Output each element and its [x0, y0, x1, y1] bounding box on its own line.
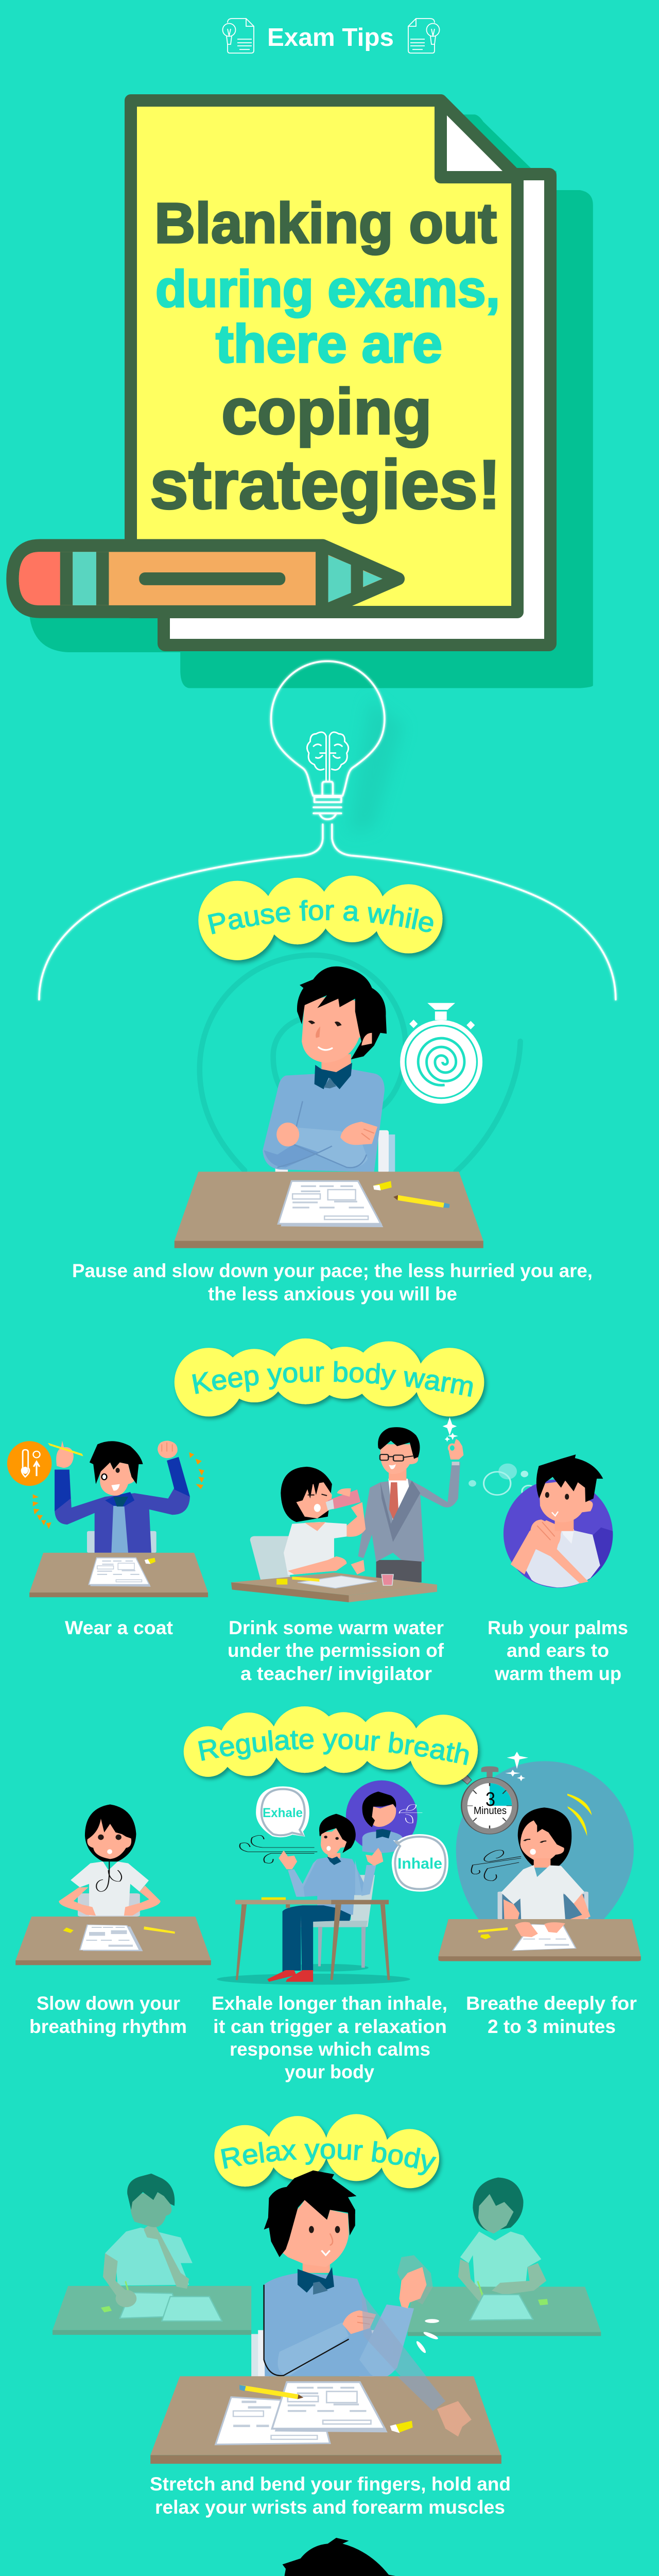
motion marks — [567, 1794, 592, 1836]
captions: it can trigger a relaxation — [213, 2016, 447, 2037]
caption: relax your wrists and forearm muscles — [155, 2497, 505, 2518]
stopwatch labels — [474, 1789, 507, 1817]
title text: strategies! — [150, 446, 501, 523]
desk — [150, 2376, 501, 2464]
ghost arm over desk — [397, 2376, 445, 2411]
exam paper — [278, 1181, 383, 1227]
purple circle — [504, 1479, 613, 1588]
caption: the less anxious you will be — [208, 1283, 457, 1304]
chair — [87, 1531, 157, 1553]
faded girl at desk — [408, 2178, 601, 2336]
captions: Slow down your — [37, 1993, 180, 2014]
captions: warm them up — [494, 1663, 621, 1684]
front page — [131, 100, 517, 612]
desk — [438, 1919, 641, 1961]
bubbles — [469, 1464, 535, 1497]
purple circle with inhaling boy — [346, 1781, 422, 1853]
captions: Breathe deeply for — [466, 1993, 637, 2014]
section: keep your body warm — [7, 1338, 628, 1684]
raised hand — [399, 2267, 427, 2309]
section: light bulb with wires — [39, 661, 616, 999]
eraser — [145, 1558, 155, 1564]
desk — [175, 1172, 483, 1248]
bubble heading: Keep your body warm — [192, 1361, 473, 1397]
illustration: background students (faded) — [53, 2174, 601, 2336]
bubble heading: Regulate your breath — [198, 1730, 469, 1765]
title text: during exams, — [155, 260, 500, 318]
student in coat — [48, 1440, 190, 1553]
back page — [164, 174, 550, 645]
wires — [39, 824, 616, 999]
exam paper — [89, 1558, 151, 1587]
boy head overlapping bubble — [269, 2171, 356, 2219]
pencil and eraser — [63, 1926, 175, 1934]
speech bubble: inhale — [392, 1834, 448, 1892]
captions: 2 to 3 minutes — [488, 2016, 616, 2037]
heading text: Exam Tips — [267, 24, 394, 52]
title text: coping — [221, 376, 432, 448]
eraser — [390, 2421, 413, 2433]
sparkles — [443, 1417, 458, 1442]
illustration: rubbing palms — [469, 1454, 613, 1588]
wind lines — [472, 1850, 521, 1881]
boy — [205, 2538, 463, 2576]
illustration: drink water with teacher — [231, 1417, 463, 1602]
icon: brain — [307, 732, 349, 782]
eraser — [373, 1181, 392, 1191]
pencil — [393, 1195, 449, 1208]
title text: Blanking out — [154, 192, 497, 255]
pencil and eraser — [478, 1927, 508, 1939]
section: pause for a while — [72, 876, 593, 1304]
bubble heading: Relax your body — [221, 2141, 437, 2175]
desk — [235, 1897, 390, 1980]
illustration: wear a coat — [7, 1440, 208, 1597]
captions: under the permission of — [228, 1640, 444, 1661]
breath lines — [96, 1860, 122, 1892]
teacher — [358, 1427, 463, 1582]
captions: response which calms — [230, 2039, 430, 2060]
captions — [65, 1617, 628, 1684]
captions: Rub your palms — [488, 1617, 628, 1638]
student — [263, 967, 387, 1172]
speech labels: Exhale — [263, 1806, 303, 1820]
girl — [59, 1804, 161, 1916]
icon: thermometer on orange circle — [7, 1441, 51, 1486]
captions: a teacher/ invigilator — [240, 1663, 432, 1684]
captions: breathing rhythm — [29, 2016, 187, 2037]
captions: Exhale longer than inhale, — [212, 1993, 447, 2014]
chair — [294, 1875, 375, 1968]
illustration: boy making fists — [177, 2538, 488, 2576]
stopwatch labels: Minutes — [474, 1805, 507, 1817]
sparkles — [505, 1752, 528, 1781]
caption: Pause and slow down your pace; the less hurried you are, — [72, 1260, 593, 1281]
paper, pencil, eraser, cup on desk — [276, 1574, 393, 1588]
speech bubble: exhale — [257, 1787, 308, 1837]
caption — [150, 2473, 511, 2518]
illustration: boy exhaling and inhaling — [217, 1781, 448, 1985]
illustration: main boy stretching — [150, 2171, 501, 2464]
pencil — [12, 546, 398, 612]
bubble heading — [174, 1338, 489, 1421]
exam paper and hands — [513, 1922, 576, 1951]
caption — [72, 1260, 593, 1304]
title text: there are — [216, 314, 442, 374]
boy — [267, 1814, 383, 1982]
bubble heading: Pause for a while — [207, 900, 433, 935]
icon: stopwatch with spiral — [400, 1003, 482, 1104]
chair — [497, 1892, 588, 1920]
faint spiral — [200, 955, 521, 1172]
floor shadows — [217, 1964, 410, 1985]
blue circle — [456, 1761, 634, 1920]
captions — [29, 1993, 637, 2082]
illustration: girl slowing breath — [15, 1804, 211, 1965]
bulb shadow — [349, 700, 404, 832]
section: regulate your breath — [15, 1706, 641, 2082]
bubble heading — [183, 1706, 482, 1789]
ghost hand on desk — [437, 2401, 472, 2436]
caption: Stretch and bend your fingers, hold and — [150, 2473, 511, 2495]
captions: Drink some warm water — [229, 1617, 444, 1638]
illustration: girl with stopwatch — [438, 1752, 641, 1961]
speech labels: Inhale — [397, 1855, 442, 1872]
title text — [150, 192, 501, 523]
wind lines — [240, 1835, 317, 1863]
chair — [250, 1536, 290, 1580]
desk — [15, 1917, 211, 1965]
girl — [501, 1807, 591, 1937]
captions: Wear a coat — [65, 1617, 173, 1638]
icon: document with bulb left — [222, 19, 254, 53]
chair — [78, 1893, 140, 1917]
illustration: student with crossed arms — [175, 955, 521, 1248]
boy — [511, 1454, 603, 1587]
title panel: paper and pencil — [12, 100, 593, 688]
pencil — [239, 2385, 303, 2399]
exam paper — [80, 1925, 143, 1951]
bubble heading — [214, 2114, 439, 2188]
section: relax your body — [39, 2114, 638, 2576]
desk — [29, 1553, 208, 1597]
page fold — [441, 100, 517, 177]
boy — [264, 2171, 414, 2378]
captions: and ears to — [507, 1640, 609, 1661]
motion ticks — [415, 2319, 439, 2354]
chair — [275, 1130, 395, 1173]
stopwatch — [461, 1766, 518, 1834]
exam papers — [216, 2382, 388, 2445]
paper shadow — [29, 114, 593, 688]
bulb outline — [271, 661, 385, 819]
captions: your body — [285, 2061, 374, 2082]
desk — [231, 1572, 437, 1602]
girl drinking — [281, 1467, 366, 1575]
faded boy at desk — [53, 2174, 251, 2335]
header: Exam Tips — [222, 19, 440, 53]
stopwatch labels: 3 — [485, 1789, 495, 1810]
ghost hand and arm — [361, 2255, 445, 2411]
bubble heading — [198, 876, 447, 965]
icon: document with bulb right — [408, 19, 440, 53]
speech labels — [263, 1806, 442, 1872]
chair — [251, 2330, 380, 2377]
motion marks — [33, 1452, 204, 1529]
